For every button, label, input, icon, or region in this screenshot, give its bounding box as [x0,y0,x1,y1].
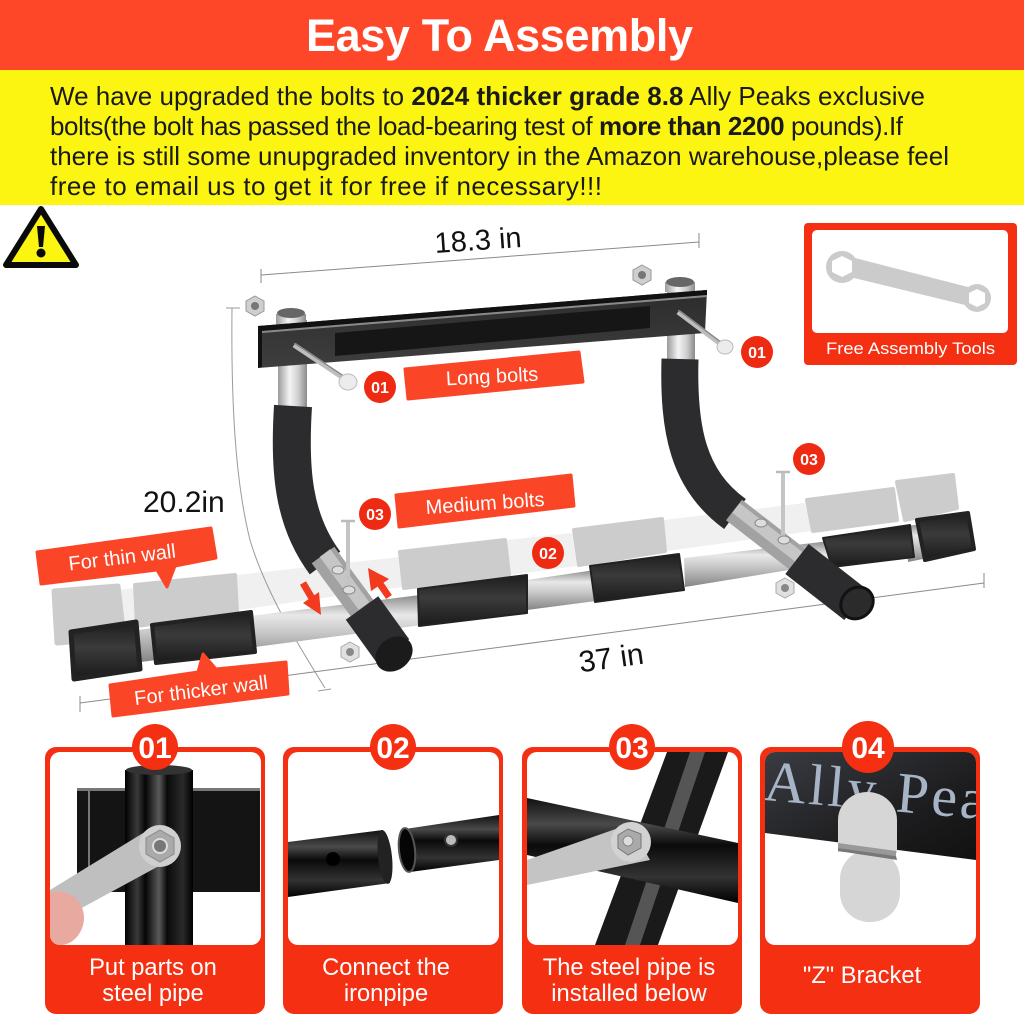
step badge 01 [132,724,178,770]
step badge 03 [609,724,655,770]
pull-up bar diagram [37,222,984,716]
step caption [89,955,217,1007]
label: long bolts: Long bolts [445,364,539,390]
step caption: Put parts on [89,955,217,981]
step badge 02: 02 [376,732,410,765]
faded wall position bar [54,475,957,643]
panel: step 04 [760,747,980,1014]
bolts [294,310,790,594]
notice text block: there is still some unupgraded inventory in the Amazon warehouse,please feel [50,141,949,171]
step badge 04 [842,721,894,773]
step caption: The steel pipe is [543,955,715,981]
step caption [322,955,450,1007]
notice text block: bolts(the bolt has passed the load-bearing test of more than 2200 pounds).If [50,111,904,141]
notice text block [0,70,1024,205]
foam arms [292,359,735,563]
photo: steel pipe below [527,752,738,945]
red arrows [303,568,389,615]
step markers: 01 [371,380,389,397]
panel: step 02 [283,747,503,1014]
nuts [246,265,794,662]
photo: connecting pipes [288,815,499,897]
photo: wrench on post [50,765,260,950]
step caption: installed below [551,981,708,1007]
photo: z bracket [765,752,976,922]
step markers: 01 [748,345,766,362]
icon: wrench [826,251,991,312]
step caption [543,955,715,1007]
step caption: steel pipe [102,981,204,1007]
title banner [0,0,1024,70]
notice text block: free to email us to get it for free if necessary!!! [50,171,602,201]
step caption: Connect the [322,955,450,981]
step markers [359,336,825,569]
panel: step 01 [45,747,265,1014]
panel: free assembly tools: Free Assembly Tools [826,339,995,358]
top mounting bar [258,290,707,368]
dimension: 37 in: 37 in [577,638,646,679]
label: long bolts [405,352,583,399]
label: for thin wall: For thin wall [67,541,177,575]
step badge 04: 04 [851,732,885,765]
photo: z bracket: Ally Peak [762,748,1024,835]
step caption: ironpipe [344,981,428,1007]
dimension: 18.3 in: 18.3 in [434,222,523,260]
step markers: 02 [539,546,557,563]
panel: free assembly tools [804,223,1017,365]
icon: warning triangle [6,209,76,265]
dimension: 37 in [80,573,984,712]
posts [276,277,695,412]
front long bar [71,513,974,679]
label: for thin wall [37,528,216,587]
panel: step 03 [522,747,742,1014]
cross tubes and end grips [323,508,880,679]
dimension: 20.2in [143,308,331,691]
step badge 01: 01 [138,732,172,765]
step markers: 03 [366,507,384,524]
label: for thicker wall: For thicker wall [133,672,269,710]
step caption: "Z" Bracket [803,963,922,989]
notice text block: We have upgraded the bolts to 2024 thicker grade 8.8 Ally Peaks exclusive [50,81,925,111]
label: medium bolts [396,475,574,527]
label: medium bolts: Medium bolts [425,489,545,519]
label: for thicker wall [110,654,288,716]
step badge 02 [370,724,416,770]
dimension: 20.2in: 20.2in [143,486,225,519]
title banner: Easy To Assembly [306,10,693,61]
dimension: 18.3 in [261,222,699,283]
step markers: 03 [800,452,818,469]
step badge 03: 03 [615,732,649,765]
